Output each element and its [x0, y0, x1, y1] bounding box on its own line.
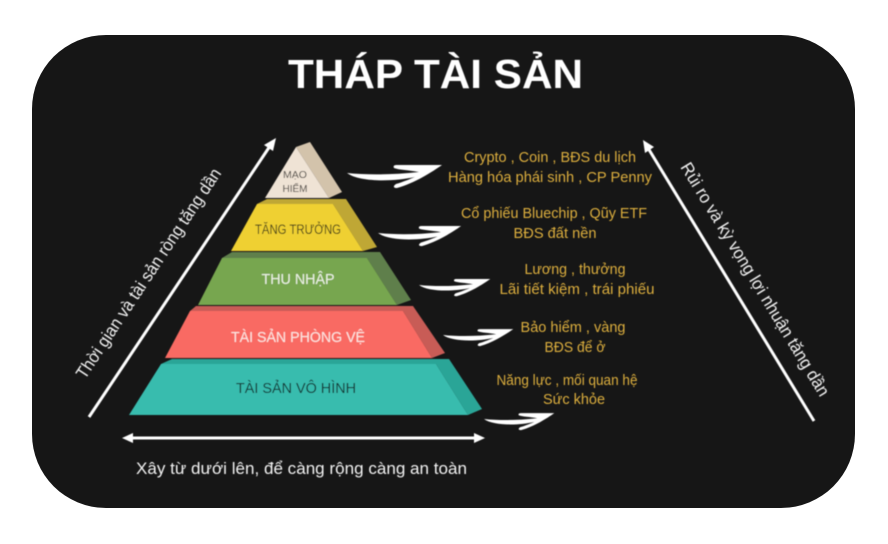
tier: Tài sản phòng vệ: TÀI SẢN PHÒNG VỆ	[231, 329, 365, 346]
tier: Tài sản phòng vệ	[165, 306, 445, 358]
examples: Thu nhập	[500, 261, 654, 298]
label: left axis: Thời gian và tài sản ròng tăng dần	[72, 164, 225, 382]
content	[72, 51, 834, 478]
examples: Tài sản phòng vệ: Bảo hiểm , vàng	[520, 319, 626, 336]
arrow: Mạo hiểm to examples	[347, 165, 442, 188]
tier: Thu nhập	[198, 252, 411, 305]
arrow: Tăng trưởng to examples	[378, 226, 461, 246]
arrow: Tài sản phòng vệ to examples	[443, 329, 513, 346]
examples: Tăng trưởng: Cổ phiếu Bluechip , Qũy ETF	[461, 205, 647, 222]
arrow: risk axis up	[643, 140, 814, 421]
examples: Tài sản vô hình: Sức khỏe	[543, 391, 605, 408]
examples: Tài sản phòng vệ: BĐS để ở	[544, 339, 606, 356]
arrow: Thu nhập to examples	[419, 279, 490, 296]
examples: Mạo hiểm: Crypto , Coin , BĐS du lịch	[464, 149, 636, 166]
tier: Mạo hiểm	[265, 142, 342, 198]
label: bottom caption: Xây từ dưới lên, để càng rộng càng an toàn	[136, 459, 467, 478]
tier: Tăng trưởng: TĂNG TRƯỞNG	[255, 222, 341, 237]
examples: Tăng trưởng	[461, 205, 647, 242]
examples: Tài sản phòng vệ	[520, 319, 626, 356]
examples: Mạo hiểm	[448, 149, 652, 186]
tier: Mạo hiểm: MẠO	[283, 169, 307, 181]
tier: Tăng trưởng	[231, 199, 377, 251]
arrow: Tài sản vô hình to examples	[484, 413, 554, 430]
tier: Mạo hiểm: HIỂM	[282, 182, 308, 195]
title: THÁP TÀI SẢN	[288, 51, 583, 97]
examples: Thu nhập: Lãi tiết kiệm , trái phiếu	[500, 281, 654, 298]
tier: Tài sản vô hình	[129, 359, 482, 415]
tier: Tài sản vô hình: TÀI SẢN VÔ HÌNH	[236, 380, 356, 397]
examples: Tăng trưởng: BĐS đất nền	[514, 225, 596, 242]
tier: Thu nhập: THU NHẬP	[262, 271, 334, 288]
examples: Mạo hiểm: Hàng hóa phái sinh , CP Penny	[448, 169, 652, 186]
arrow: width double-headed	[122, 433, 485, 443]
examples: Tài sản vô hình: Năng lực , mối quan hệ	[496, 372, 638, 389]
pyramid	[129, 142, 482, 415]
examples: Thu nhập: Lương , thưởng	[524, 261, 626, 278]
arrow: time axis up	[89, 138, 276, 417]
label: right axis: Rủi ro và kỳ vọng lợi nhuận tăng dần	[677, 159, 834, 400]
examples: Tài sản vô hình	[496, 372, 638, 408]
